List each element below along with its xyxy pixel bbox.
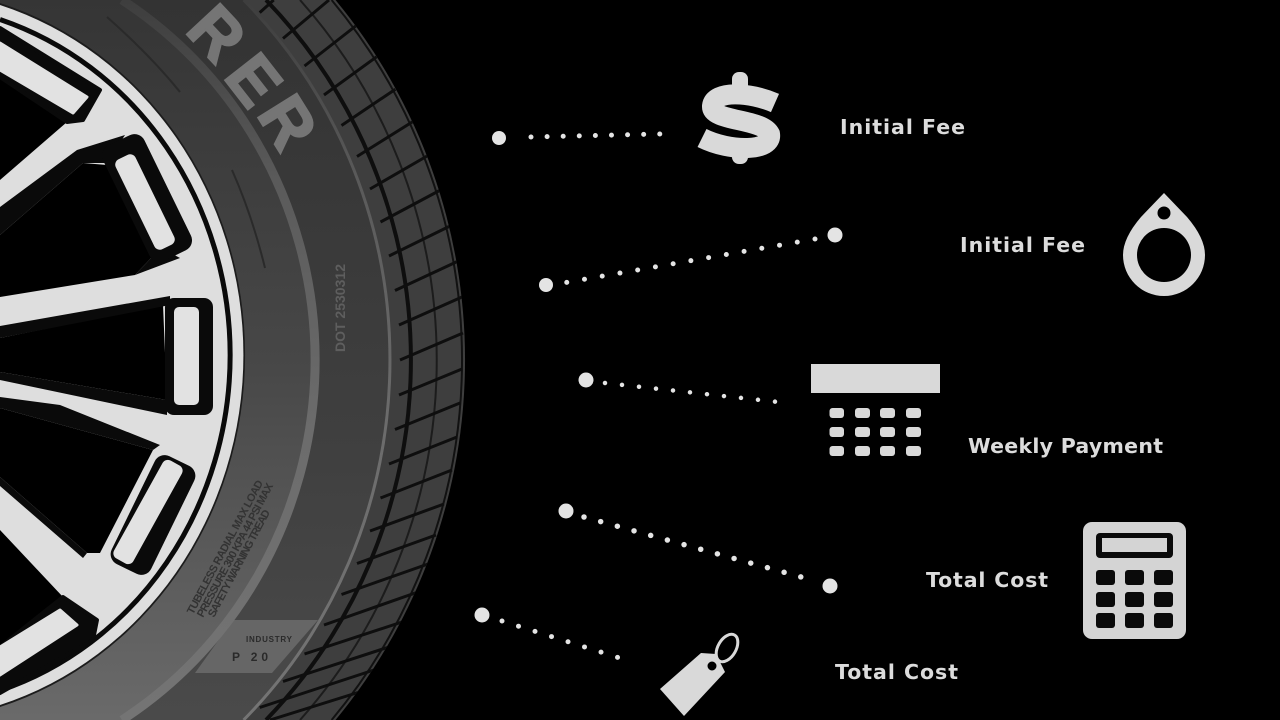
brand lettering [174, 0, 332, 162]
tire and wheel [0, 0, 465, 720]
connector 3 [578, 372, 778, 402]
label band text: INDUSTRY [246, 635, 293, 644]
icon: price tag [660, 631, 742, 716]
sidewall code text: DOT 2530312 [332, 264, 348, 352]
connector 2 [539, 228, 842, 292]
label: Weekly Payment: Weekly Payment [968, 434, 1163, 458]
label: Total Cost: Total Cost [926, 568, 1048, 592]
label: Total Cost second: Total Cost [835, 660, 958, 684]
icon: teardrop ring [1123, 193, 1205, 296]
label band text: P 20 [232, 650, 268, 664]
label: Initial Fee second: Initial Fee [960, 233, 1085, 257]
connector 5 [474, 608, 626, 660]
icon: dollar sign [702, 72, 775, 164]
rim windows [0, 77, 167, 647]
sidewall fine print: PRESSURE 300 KPA 44 PSI MAX [195, 481, 276, 619]
rim spoke grooves [0, 135, 180, 558]
tire body [0, 0, 465, 720]
sidewall fine print: TUBELESS RADIAL MAX LOAD [185, 478, 266, 616]
brand lettering: E [211, 40, 297, 120]
label band text [232, 635, 293, 664]
rim slots [0, 43, 199, 675]
icon: calculator [1083, 522, 1186, 639]
sidewall grooves [107, 17, 265, 268]
icon: calendar grid [811, 364, 940, 456]
tread band [260, 0, 465, 720]
lighter label band [195, 620, 318, 673]
wheel rim [0, 3, 245, 707]
brand lettering: R [244, 82, 332, 162]
connector 1 [492, 131, 660, 145]
connector 4 [558, 504, 838, 594]
sidewall fine print: SAFETY WARNING TREAD [206, 508, 273, 619]
sidewall panel [0, 0, 390, 720]
label: Initial Fee: Initial Fee [840, 115, 965, 139]
rim slot surrounds [0, 28, 213, 693]
sidewall lower band [0, 0, 315, 720]
